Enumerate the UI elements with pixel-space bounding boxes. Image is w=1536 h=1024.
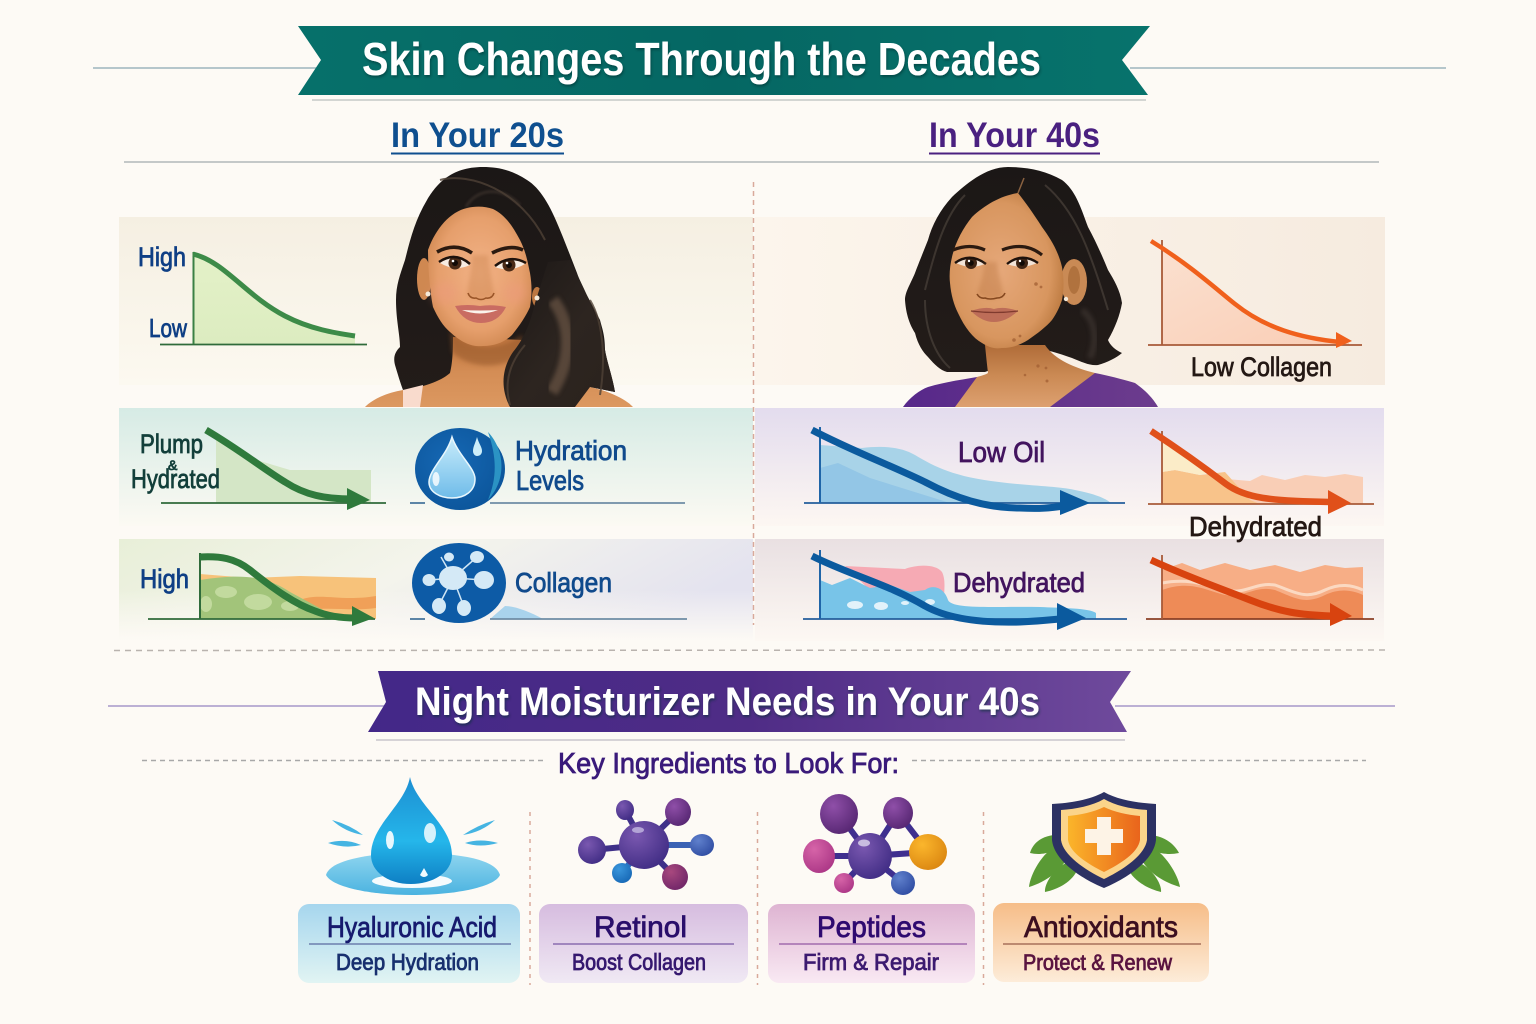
chart: dehydrated decline, orange: Dehydrated bbox=[1189, 511, 1322, 542]
label: collagen: Collagen bbox=[515, 567, 612, 598]
card: antioxidants bbox=[993, 903, 1209, 982]
subheading: key ingredients: Key Ingredients to Look For: bbox=[558, 748, 899, 780]
card: hyaluronic acid: Hyaluronic Acid bbox=[327, 912, 497, 944]
label: hydration levels bbox=[490, 435, 685, 503]
chart: high collagen decline, 20s bbox=[140, 553, 376, 626]
icon: water drop with splash bbox=[326, 777, 500, 895]
chart: plump and hydrated decline bbox=[131, 429, 386, 510]
card: retinol: Boost Collagen bbox=[572, 949, 706, 975]
icon: retinol molecule bbox=[578, 798, 714, 890]
chart: high to low curve, 20s: Low bbox=[149, 313, 187, 343]
card: peptides: Firm & Repair bbox=[803, 949, 939, 975]
icon: antioxidant shield with leaves bbox=[1029, 792, 1180, 892]
icon: collagen molecule bbox=[410, 543, 543, 623]
panel: row three, 40s bbox=[755, 539, 1384, 641]
panel: row three, 20s bbox=[119, 539, 753, 641]
chart: low oil decline: Low Oil bbox=[958, 437, 1045, 469]
title banner bbox=[93, 26, 1446, 100]
chart: skin layers decline, orange bbox=[1146, 555, 1374, 626]
panel: row two, 20s bbox=[119, 408, 753, 526]
label: hydration levels: Hydration bbox=[515, 435, 627, 466]
card: peptides: Peptides bbox=[817, 911, 926, 944]
chart: high to low curve, 20s: High bbox=[138, 242, 186, 272]
card: hyaluronic acid: Deep Hydration bbox=[336, 949, 479, 975]
portrait: woman in her 40s bbox=[903, 167, 1158, 407]
card: peptides bbox=[768, 904, 975, 983]
card: antioxidants: Antioxidants bbox=[1024, 911, 1178, 944]
chart: low collagen curve, 40s bbox=[1148, 240, 1362, 382]
panel: row one, 40s bbox=[755, 217, 1385, 385]
heading: In Your 40s: In Your 40s bbox=[929, 116, 1100, 155]
chart: high to low curve, 20s bbox=[138, 242, 367, 344]
card: antioxidants: Protect & Renew bbox=[1023, 950, 1172, 975]
title banner: Skin Changes Through the Decades bbox=[362, 33, 1041, 85]
chart: plump and hydrated decline: Hydrated bbox=[131, 464, 220, 494]
chart: dehydrated decline, orange bbox=[1148, 431, 1374, 542]
card: retinol bbox=[539, 904, 748, 983]
chart: plump and hydrated decline: & bbox=[168, 457, 178, 473]
chart: low oil decline bbox=[804, 427, 1125, 515]
panel: row one, 20s bbox=[119, 217, 753, 385]
icon: hydration drop bbox=[410, 428, 505, 510]
panel: row two, 40s bbox=[755, 408, 1384, 526]
chart: high collagen decline, 20s: High bbox=[140, 564, 189, 594]
label: hydration levels: Levels bbox=[516, 465, 584, 496]
icon: peptides molecule bbox=[803, 794, 947, 895]
night moisturizer banner bbox=[108, 671, 1395, 740]
chart: plump and hydrated decline: Plump bbox=[140, 429, 203, 459]
chart: dehydrated decline, blue: Dehydrated bbox=[953, 567, 1085, 598]
chart: dehydrated decline, blue bbox=[803, 550, 1127, 630]
card: hyaluronic acid bbox=[298, 904, 520, 983]
heading: In Your 20s: In Your 20s bbox=[391, 116, 564, 155]
card: retinol: Retinol bbox=[594, 911, 687, 944]
chart: low collagen curve, 40s: Low Collagen bbox=[1191, 352, 1332, 382]
portrait: woman in her 20s bbox=[365, 167, 633, 407]
night moisturizer banner: Night Moisturizer Needs in Your 40s bbox=[415, 680, 1040, 724]
